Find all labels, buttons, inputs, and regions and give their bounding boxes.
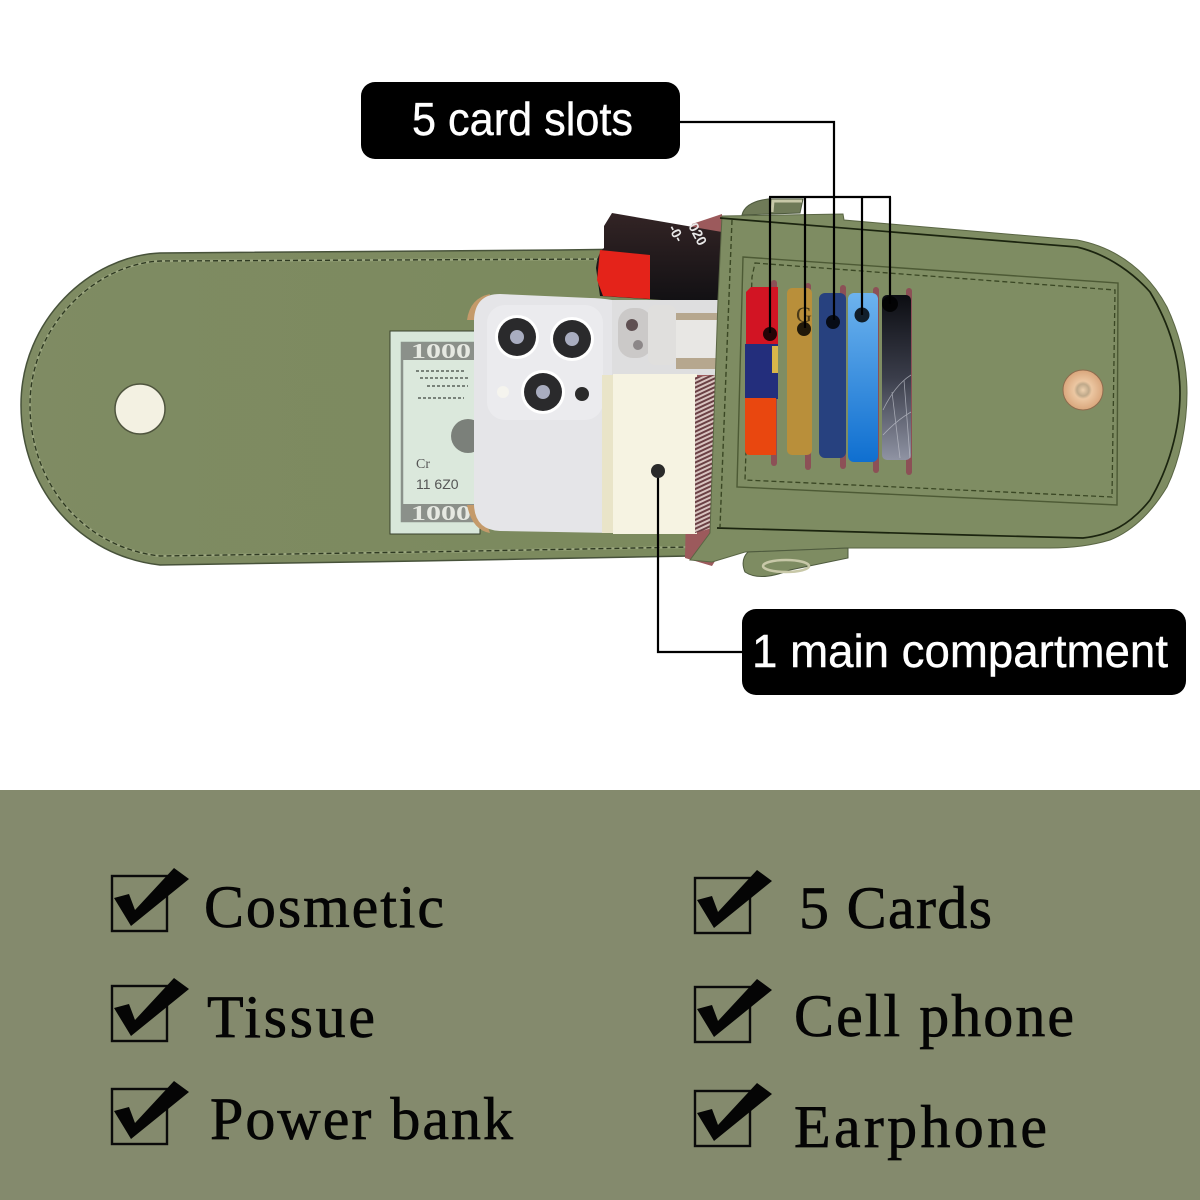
card: red xyxy=(745,287,778,455)
callout pointer: 5 card slots xyxy=(680,122,898,341)
list item: 5 Cards: 5 Cards xyxy=(799,875,992,941)
callout: 1 main compartment xyxy=(742,609,1186,695)
list item: Tissue xyxy=(112,978,375,1050)
panel: capacity checklist xyxy=(0,790,1200,1200)
list item: Power bank: Power bank xyxy=(210,1086,513,1152)
card: gold: G xyxy=(796,302,812,327)
dollar bill: Cr xyxy=(416,457,430,472)
tissue pack xyxy=(602,374,716,534)
lipstick xyxy=(596,213,722,304)
callout: 5 card slots xyxy=(361,82,680,159)
callout pointer: 1 main compartment xyxy=(651,464,742,652)
strap loop bottom xyxy=(743,548,848,577)
icon: flap magnetic snap xyxy=(115,384,165,434)
card: navy xyxy=(819,293,846,458)
list item: 5 Cards xyxy=(695,870,992,941)
icon: front magnetic snap xyxy=(1063,370,1103,410)
lipstick: -0- xyxy=(665,222,688,245)
bag: interior lining xyxy=(685,214,728,566)
strap loop top xyxy=(742,199,803,215)
list item: Cell phone: Cell phone xyxy=(794,983,1074,1049)
callout: 5 card slots: 5 card slots xyxy=(412,93,633,145)
main compartment interior xyxy=(595,300,720,375)
bag: front panel xyxy=(690,214,1187,562)
list item: Earphone xyxy=(695,1083,1047,1160)
bag: open flap xyxy=(21,248,704,565)
icon: camera lens 3 xyxy=(521,370,565,414)
lipstick: 020 xyxy=(685,220,711,248)
smartphone xyxy=(467,294,612,533)
list item: Cell phone xyxy=(695,979,1074,1049)
callout: 1 main compartment: 1 main compartment xyxy=(752,625,1168,677)
perfume bottle xyxy=(618,305,720,365)
icon: camera lens 1 xyxy=(495,315,539,359)
card: gold xyxy=(787,288,812,455)
card: black xyxy=(882,295,911,460)
icon: camera lens 2 xyxy=(550,317,594,361)
list item: Tissue: Tissue xyxy=(207,984,375,1050)
list item: Cosmetic xyxy=(112,868,444,940)
dollar bill: 11 6Z0 xyxy=(416,476,459,492)
dollar bill xyxy=(390,331,485,534)
dollar bill: 1000 xyxy=(411,339,471,363)
card slots xyxy=(745,280,912,475)
dollar bill: 1000 xyxy=(411,501,471,525)
card: blue xyxy=(848,293,878,462)
list item: Cosmetic: Cosmetic xyxy=(204,874,444,940)
list item: Earphone: Earphone xyxy=(794,1094,1047,1160)
